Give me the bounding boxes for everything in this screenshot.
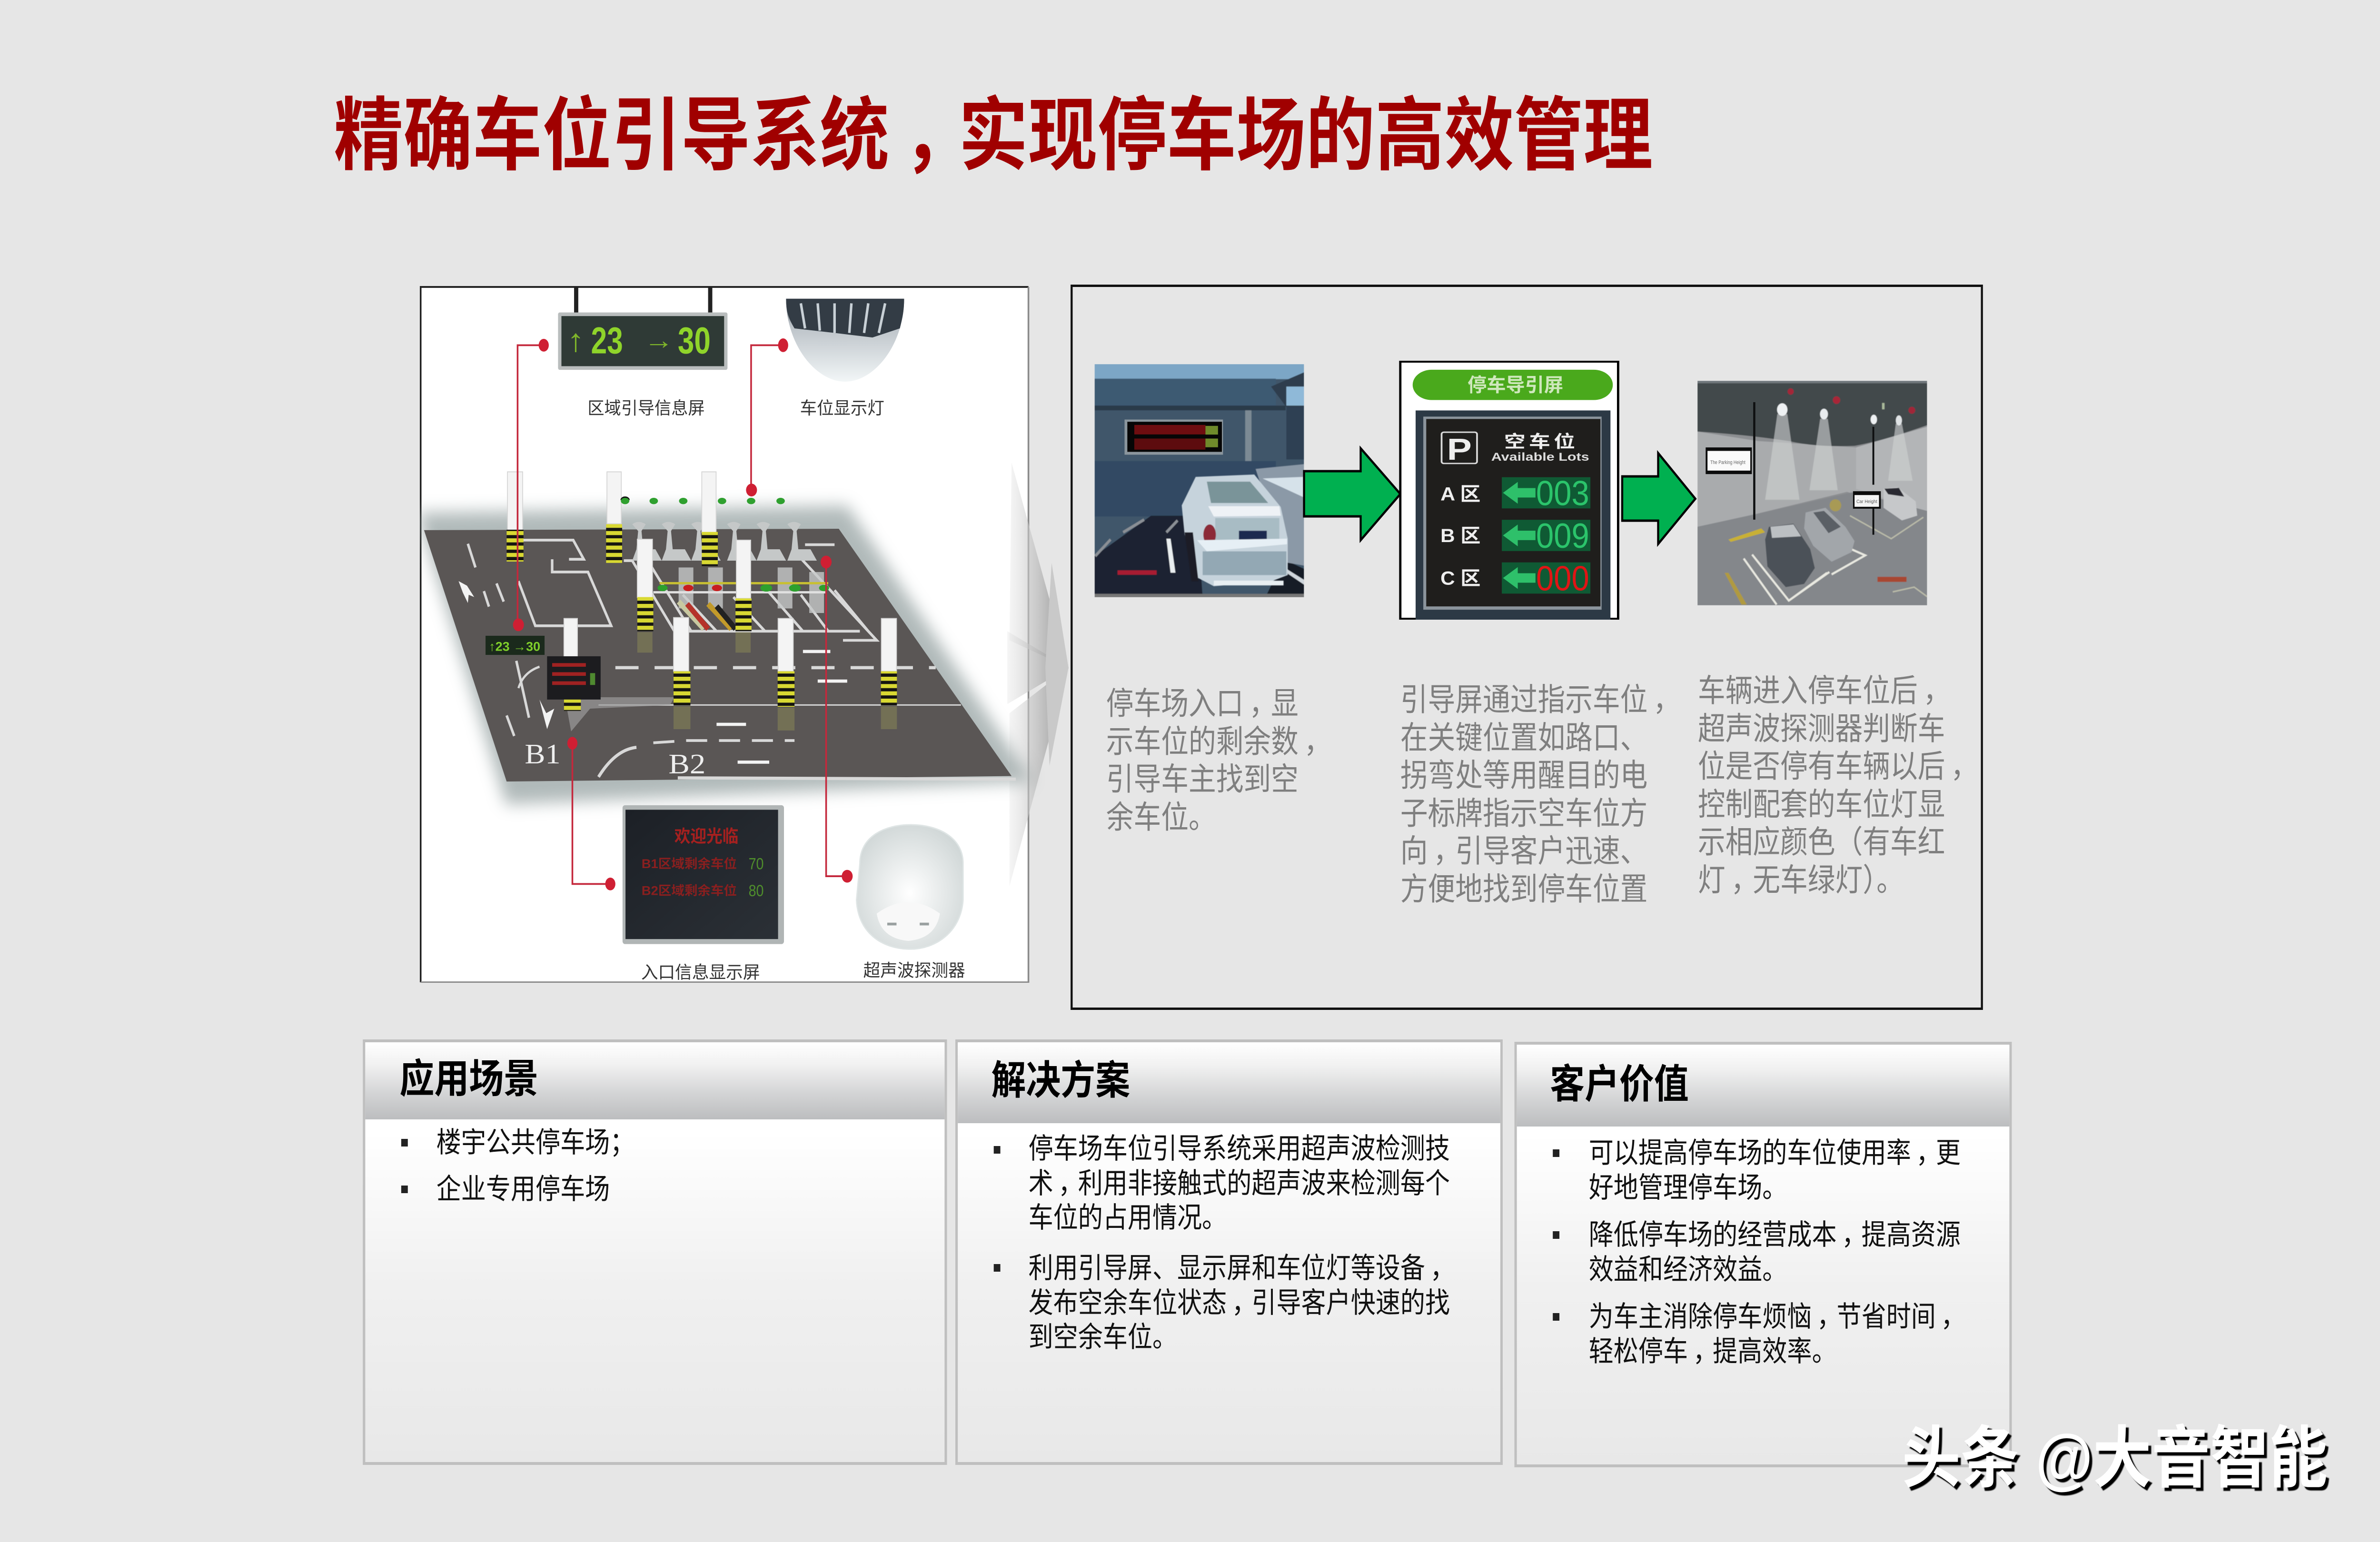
posts and signs: The Parking Height	[1710, 460, 1746, 465]
zone guidance sign: →	[644, 326, 674, 354]
list item: 企业专用停车场	[436, 1173, 610, 1205]
bullet	[401, 1139, 408, 1147]
step 1 description: 余车位。	[1106, 800, 1216, 835]
indicator lamps	[620, 496, 785, 504]
diagram background	[421, 287, 1029, 982]
list item: 发布空余车位状态，引导客户快速的找	[1029, 1287, 1450, 1318]
step 2 description: 拐弯处等用醒目的电	[1400, 758, 1647, 793]
bullet	[1553, 1231, 1559, 1239]
list item: 为车主消除停车烦恼，节省时间，	[1589, 1301, 1965, 1333]
screen body: 009	[1536, 516, 1589, 555]
step 2 description: 子标牌指示空车位方	[1400, 796, 1647, 831]
step 1 description: 示车位的剩余数，	[1106, 724, 1331, 760]
small signs on floor	[486, 636, 601, 700]
white car	[1182, 474, 1288, 586]
entrance info screen	[623, 805, 784, 944]
list item: 到空余车位。	[1029, 1321, 1177, 1353]
screen body: 000	[1536, 559, 1589, 598]
heading: application scenarios: 应用场景	[399, 1057, 538, 1101]
zone guidance sign: 30	[678, 320, 711, 362]
list item: 可以提高停车场的车位使用率，更	[1589, 1137, 1961, 1169]
step 3 description: 超声波探测器判断车	[1698, 711, 1945, 746]
bullet	[1553, 1313, 1559, 1321]
step 1 description: 停车场入口，显	[1106, 686, 1299, 722]
panel: customer value	[1514, 1042, 2012, 1467]
list item: 效益和经济效益。	[1589, 1254, 1787, 1285]
entrance info screen: 80	[749, 882, 764, 900]
list item	[1589, 1136, 1961, 1205]
entrance info screen: 70	[749, 855, 764, 873]
entrance info screen: 欢迎光临	[674, 827, 738, 846]
chevron arrow	[1007, 463, 1069, 886]
step 2 description: 向，引导客户迅速、	[1400, 834, 1647, 869]
screen body: Available Lots	[1491, 451, 1589, 463]
list item: 停车场车位引导系统采用超声波检测技	[1029, 1133, 1450, 1165]
step 2 description	[1400, 682, 1675, 909]
bullet	[994, 1264, 1001, 1272]
ultrasonic detector	[856, 825, 963, 949]
panel header band	[365, 1043, 944, 1119]
screen body	[1416, 410, 1610, 620]
list item: 利用引导屏、显示屏和车位灯等设备，	[1029, 1252, 1455, 1284]
small signs on floor: ↑23 →30	[489, 640, 540, 654]
entrance LED sign	[1124, 420, 1223, 455]
watermark: 头条 @大音智能	[1902, 1421, 2328, 1496]
panel: process steps frame	[1071, 285, 1983, 1010]
step 3 description	[1698, 672, 1973, 900]
heading: solution: 解决方案	[991, 1058, 1130, 1103]
panel: parking system diagram	[420, 286, 1071, 983]
list item: 好地管理停车场。	[1589, 1172, 1787, 1203]
arrow: step 2 to step 3	[1620, 450, 1698, 547]
screen body: A 区	[1440, 483, 1480, 504]
parking floor: B1	[525, 739, 561, 770]
screen body: 003	[1536, 474, 1589, 513]
list item: 楼宇公共停车场；	[436, 1127, 635, 1158]
posts and signs: Car Height	[1856, 499, 1877, 504]
step 3 description: 控制配套的车位灯显	[1698, 787, 1945, 822]
step 3 description: 灯，无车绿灯）。	[1698, 862, 1904, 898]
list item	[1029, 1251, 1450, 1354]
zone guidance sign	[558, 287, 727, 370]
step 2 description: 引导屏通过指示车位，	[1400, 682, 1681, 718]
zone guidance sign: 23	[591, 320, 623, 362]
list item: 术，利用非接触式的超声波来检测每个	[1029, 1167, 1450, 1199]
panel: solution	[955, 1039, 1503, 1465]
step 1 description	[1106, 685, 1326, 837]
step 2 description: 方便地找到停车位置	[1400, 872, 1647, 907]
photo: parking bays with sensors	[1697, 381, 1927, 605]
step 3 description: 示相应颜色（有车红	[1698, 825, 1945, 860]
arrow: step 1 to step 2	[1301, 445, 1403, 543]
screen heading pill: 停车导引屏	[1468, 374, 1563, 395]
list item	[1029, 1132, 1450, 1236]
parking floor	[417, 506, 1032, 804]
sensors and parked cars	[632, 522, 829, 629]
pillars	[506, 472, 897, 731]
label: parking lamp: 车位显示灯	[800, 399, 884, 418]
panel header band	[958, 1043, 1500, 1123]
step 1 description: 引导车主找到空	[1106, 762, 1299, 797]
parking lamp dome	[786, 299, 904, 382]
panel: application scenarios	[363, 1039, 947, 1465]
callout dots	[513, 338, 853, 890]
screen body: C 区	[1440, 567, 1480, 589]
posts and signs	[1706, 402, 1881, 535]
label: ultrasonic detector: 超声波探测器	[863, 961, 965, 980]
title: 精确车位引导系统，实现停车场的高效管理	[334, 91, 1653, 180]
list item: 轻松停车，提高效率。	[1589, 1335, 1837, 1367]
list item: 降低停车场的经营成本，提高资源	[1589, 1219, 1961, 1251]
step 3 description: 车辆进入停车位后，	[1698, 673, 1951, 709]
step 2 description: 在关键位置如路口、	[1400, 721, 1647, 756]
step 3 description: 位是否停有车辆以后，	[1698, 749, 1978, 784]
parking floor: B2	[668, 749, 705, 780]
zone guidance sign: ↑	[567, 323, 585, 358]
list item	[1589, 1218, 1961, 1287]
label: zone guidance: 区域引导信息屏	[587, 399, 705, 418]
guidance screen	[1399, 361, 1619, 620]
entrance info screen: B2区域剩余车位	[642, 883, 737, 898]
panel header band	[1517, 1045, 2009, 1127]
photo: parking entrance with car	[1094, 364, 1304, 597]
screen body: 空车位	[1504, 432, 1575, 451]
heading: customer value: 客户价值	[1550, 1062, 1689, 1107]
bullet	[1553, 1149, 1559, 1157]
screen body: P	[1447, 433, 1472, 466]
list item: 车位的占用情况。	[1029, 1202, 1227, 1234]
callout lines	[517, 345, 846, 884]
screen body: B 区	[1440, 525, 1480, 546]
entrance info screen: B1区域剩余车位	[642, 856, 737, 871]
bullet	[401, 1186, 408, 1193]
screen heading pill	[1413, 370, 1613, 400]
list item	[1589, 1300, 1961, 1369]
bullet	[994, 1146, 1001, 1154]
label: entrance screen: 入口信息显示屏	[641, 963, 760, 982]
